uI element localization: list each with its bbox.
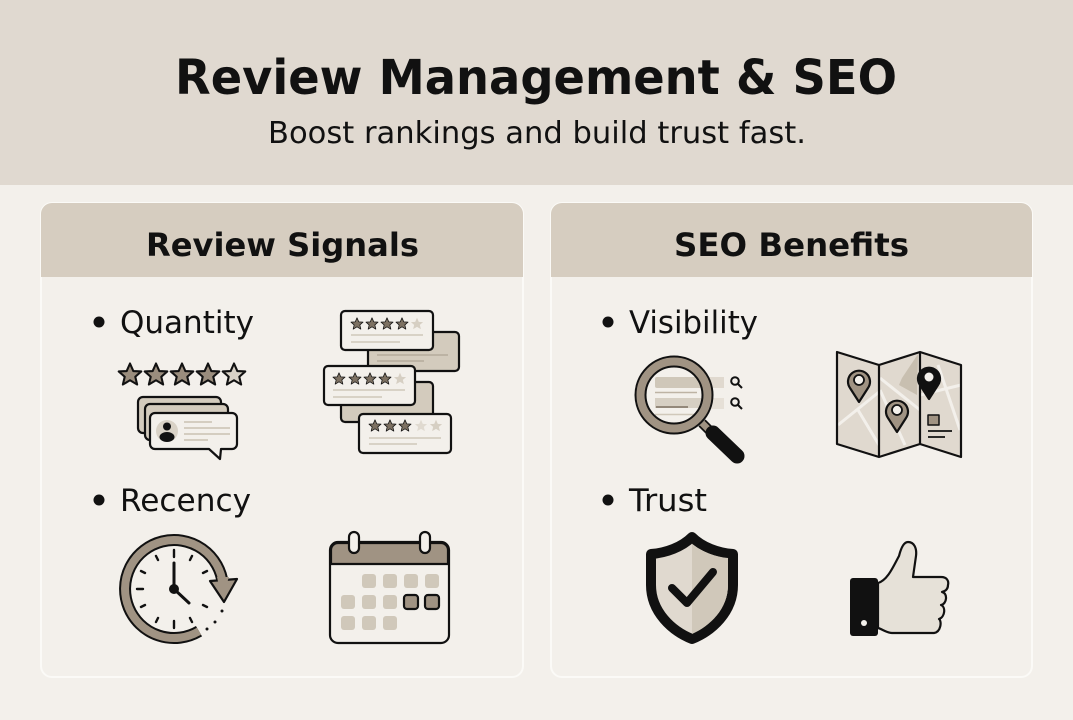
title: Review Management & SEO xyxy=(175,50,897,106)
icon: shield with check xyxy=(651,537,733,639)
icon: folded map with pins xyxy=(837,352,961,457)
panel: review signals xyxy=(41,203,523,677)
header band xyxy=(0,0,1073,185)
pin 2 xyxy=(886,401,908,432)
pin 1 xyxy=(848,371,870,402)
panel: seo benefits xyxy=(551,203,1032,677)
icon: clock with arrow xyxy=(125,540,237,638)
bullet: trust xyxy=(602,483,707,519)
label: quantity: Quantity xyxy=(120,305,254,341)
label: visibility: Visibility xyxy=(629,305,758,341)
label: recency: Recency xyxy=(120,483,251,519)
icon: five stars and chat bubbles xyxy=(119,364,245,459)
icon: calendar xyxy=(330,532,449,643)
panel heading bar: seo benefits xyxy=(551,203,1032,277)
subtitle: Boost rankings and build trust fast. xyxy=(268,116,806,151)
pin 3 xyxy=(918,368,940,399)
map legend xyxy=(928,415,952,437)
icon: stacked review cards xyxy=(324,311,459,453)
icon: thumbs up xyxy=(850,542,948,636)
panel heading bar: review signals xyxy=(41,203,523,277)
bullet: visibility xyxy=(602,305,758,341)
bullet: recency xyxy=(94,483,251,519)
bullet: quantity xyxy=(94,305,254,341)
label: trust: Trust xyxy=(628,483,707,519)
icon: magnifying glass xyxy=(640,362,742,456)
heading: review signals: Review Signals xyxy=(146,226,419,264)
heading: seo benefits: SEO Benefits xyxy=(674,226,909,264)
